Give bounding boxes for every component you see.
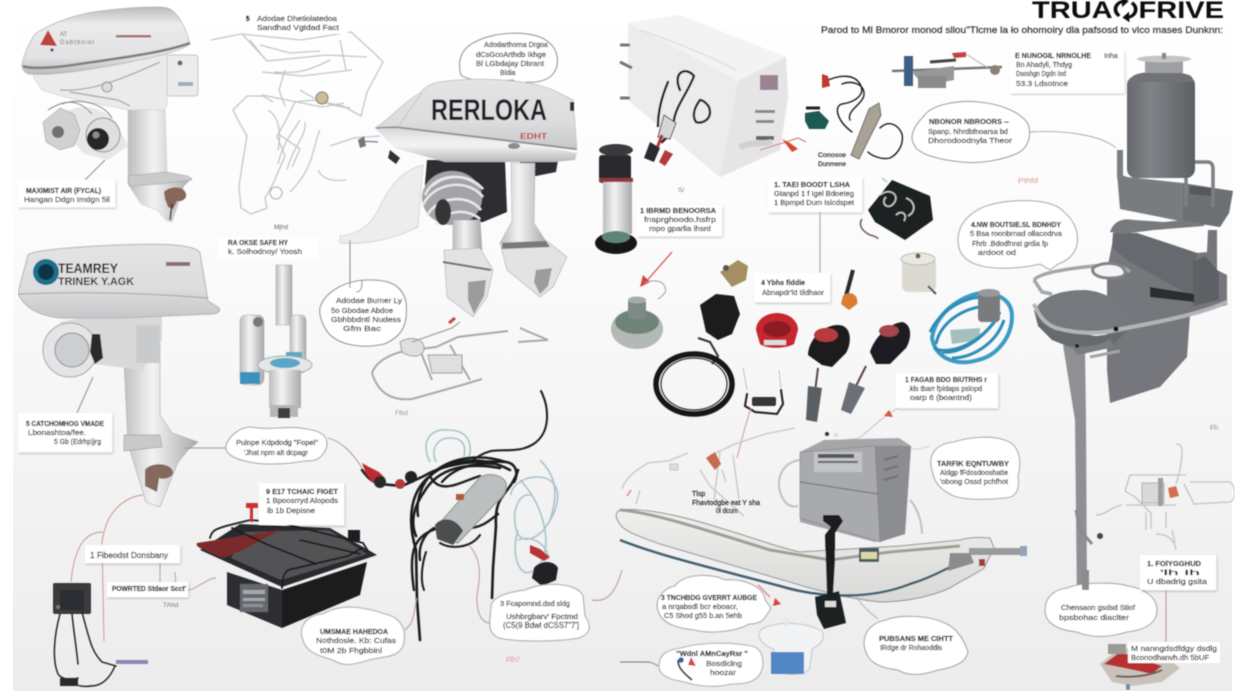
bubble: pump (184, 427, 362, 468)
pipework sketch with caption: 0l dcum (716, 508, 738, 515)
boat hull (616, 510, 1027, 602)
filter cylinders (240, 265, 312, 418)
red machine part with label: M nanngdsdfdgy dsdlg (1131, 646, 1217, 653)
bubble: right bottom: bpsbohac diaclter (1059, 615, 1130, 622)
label: sensors: ropo gparlia ihsrd (649, 226, 711, 233)
label: lower centre right: 1 FAGAB BDO BIUTRHS r (905, 377, 987, 384)
control box with cables (53, 495, 216, 686)
bubble: top centre: Bldia (500, 70, 516, 77)
label: small centre right: Abnapdr'ld tildhaor (762, 290, 825, 297)
bubble: right upper: Dhorodoodnyla Theor (928, 138, 1013, 145)
bracket part (892, 52, 1002, 88)
small notes: S/ (678, 187, 684, 194)
label: mid right (768, 177, 862, 212)
label: mid right: Gtanpd 1 f Igel Bdoeteg (774, 191, 854, 198)
label: case (259, 483, 344, 525)
bubble: pumps lower: 3 TNCHBDG GVERRT AUBGE (661, 595, 757, 602)
label: filter (217, 237, 318, 259)
bubble: lower centre (469, 545, 622, 641)
bubble: ignition (620, 643, 763, 686)
outboard motor: RERLOKA: RERLOKA (431, 94, 547, 127)
label: sketch (246, 13, 348, 34)
label: right lower: 1. FOlYGGHUD (1147, 561, 1201, 568)
label: case: ib 1b Depisne (267, 508, 315, 515)
label: sensors (637, 205, 722, 236)
label: top right: Inha (1104, 53, 1118, 60)
label: sensors: fnsprghoodo.hsfrp (644, 217, 716, 224)
bubble: ignition: hoozar (710, 670, 737, 677)
label: left caption: Lbonashtoa/fee. (28, 430, 86, 437)
bubble: control: Aldgp fFdosdooshatte (940, 470, 1008, 477)
label: powered (107, 582, 188, 597)
label: small centre right (754, 212, 830, 302)
bubble: pump: Pulnpe Kdpdodg "Fopel" (236, 440, 319, 447)
label: top right (1010, 50, 1124, 93)
bubble: right middle: Fhrb .Bdodfnrat grdia fp (972, 241, 1048, 248)
bubble: mid centre left: Gbhbbdntl Nudess (331, 317, 402, 324)
white cooling unit (620, 15, 806, 177)
label: lower centre right: .kls tbarr fpldaps pslopd (908, 386, 982, 393)
small notes: Ffh7 (506, 657, 520, 664)
bubble: lower centre left (301, 598, 417, 664)
label: right lower: 'lh Ih (1160, 570, 1200, 577)
bubble: lower right centre (856, 597, 968, 674)
bubble: mid centre left: 5o Gbodae Abdoe (331, 308, 393, 315)
red machine part with label: Bconodhanvh.dh 5bUF (1131, 655, 1209, 662)
black control case with red handle (197, 503, 377, 628)
gray vertical drive unit (1034, 53, 1233, 602)
label: sketch: Sandhad Vgtdad Fact (257, 25, 339, 32)
bubble: top centre (460, 33, 557, 86)
label: right lower (1140, 555, 1216, 642)
pipework sketch right (1096, 425, 1234, 550)
label: top right: Dsoshgn Dgdn Iod (1016, 71, 1066, 78)
bubble: lower centre left: Nothdosle. Kb: Cufas (316, 638, 397, 645)
label: air intake: MAXIMIST AIR (FYCAL) (26, 188, 101, 195)
bubble: pump: 'Jhat npm alt dcpagr (244, 450, 309, 457)
bubble: pumps lower: a nrqabsdl bcr eboacr, (662, 604, 738, 611)
label: air intake: Hangan Ddgn Imdgn 5il (24, 197, 111, 204)
bubble: lower right centre: IRdge dr Rohaoddis (880, 645, 942, 652)
small notes (163, 187, 684, 664)
wiring components: Dunmene (818, 161, 846, 168)
small notes: 7Ahd (163, 602, 179, 609)
outboard motor: RERLOKA: EDHT (520, 132, 547, 141)
black coil part (860, 178, 933, 240)
gray electronics box (779, 432, 922, 542)
label: case: 1 Bpoosrryd Alopods (266, 498, 339, 505)
label: lower centre right: oarp 6 (boantnd) (910, 395, 972, 402)
outboard motor: TEAMREY: TEAMREY (58, 260, 119, 276)
label: telescopic: 1 Fibeodst Donsbany (90, 551, 168, 560)
bubble: lower centre: (C5(9 Bdwl dCSS7"7'] (503, 621, 579, 630)
bubble: right middle: 4.NW BOUTSIE.SL BDNHDY (971, 222, 1061, 229)
bubble: right upper: Spanp. Nhrdbfnoarsa bd (928, 129, 1008, 136)
bubble: lower centre: 3 Fcapomnd.dsd sldg (500, 601, 570, 608)
label: small centre right: 4 Ybhs fiddie (761, 280, 805, 287)
bubble: top centre: dCsGcoArthdb Ikhge (476, 52, 546, 59)
small notes: Mjhd (274, 224, 288, 231)
label: right lower: U dbadrig gsita (1147, 579, 1207, 586)
bubble: ignition: "Wdnl AMnCayRsr " (676, 651, 748, 658)
pipework sketch with caption (622, 428, 795, 516)
label: sketch: Adodae Dhetiolatedoa (257, 16, 337, 23)
bubble: right bottom: Chensaon gsdsd Stiof (1061, 605, 1135, 612)
wiring components (805, 74, 902, 168)
label: sketch: 5 (246, 16, 250, 23)
small red note: Pthfd (1018, 178, 1038, 185)
red machine part with label (1100, 642, 1220, 690)
bubble: pumps lower: C5 Shod g55 b.an 5ehb (664, 613, 742, 620)
label: top right: E NUNOGIL NRNOLHE (1015, 53, 1091, 60)
red ring and sensors (756, 270, 910, 422)
white bowl with blue label (759, 616, 823, 674)
transparent tubing assembly (350, 240, 548, 399)
label: left caption (18, 377, 112, 452)
bubble: right bottom (1045, 570, 1157, 636)
outboard motor: top left (22, 7, 198, 222)
outboard motor: RERLOKA (340, 79, 577, 317)
pipework sketch right: Fh (1210, 425, 1218, 432)
label: sensors: 1 IBRMD BENOORSA (640, 208, 716, 215)
line sketch of motor (211, 32, 383, 214)
label: case: 9 E17 TCHAIC FIGET (266, 489, 339, 496)
bubble: lower right centre: PUBSANS ME CIHTT (879, 636, 954, 643)
subtitle: Parod to Ml Bmoror monod sllou"Tlcme la ło ohomoiry dla pafsosd to vlco mases Dunknn: (821, 25, 1223, 35)
wire harness and pump (362, 391, 558, 640)
bubble: right upper (912, 102, 1116, 163)
blue hose coil (930, 289, 1012, 362)
bubble: top centre: Bl LGbdajay Dbrant (476, 61, 544, 68)
bubble: lower centre left: UMSMAE HAHEDOA (320, 629, 388, 636)
label: top right: Bn Ahadyli, Thdyg (1016, 62, 1072, 69)
label: filter: RA OKSE SAFE HY (228, 240, 288, 247)
outboard motor: TEAMREY: TRINEK Y.AGK (58, 276, 134, 288)
bubble: lower centre: Ushbrgbarv' Fpctmd (506, 614, 578, 621)
bubble: right middle: 5 Bsa roonbrnad ollacodrva (970, 231, 1062, 238)
label: mid right: 1 Bpmpd Dum Islcdspet (774, 200, 854, 207)
bubble: lower centre left: t0M 2b Fhgbbinl (320, 648, 383, 655)
pipework sketch with caption: Tlsp (692, 491, 705, 498)
outboard motor: top left: Dabtbolat (60, 40, 94, 46)
cable and black plug (815, 515, 846, 629)
bubble: right middle (958, 201, 1078, 270)
bubble: top centre: Adodarthoma Drgoa (484, 42, 548, 49)
green valve (611, 296, 663, 349)
handle with red line (737, 368, 783, 458)
bubble: mid centre left: Adodae Bumer Ly (336, 298, 403, 305)
pipework sketch with caption: Fhavtodgbe eat Y sha (692, 500, 760, 507)
canister (901, 253, 936, 294)
label: powered: POWRTED Stdaor Scct' (112, 586, 186, 593)
outboard motor: top left: AT (60, 32, 68, 38)
label: telescopic (85, 545, 180, 563)
label: filter: k. Solhodnoy/ Yoosh (228, 249, 302, 256)
dark cylinder (595, 144, 637, 254)
black ring harness (656, 260, 748, 414)
bubble: mid centre left: Gfm Bac (343, 326, 382, 333)
bubble: right middle: ardoot od (978, 250, 1016, 257)
label: left caption: 5 CATCHOMHOG VMADE (26, 421, 104, 428)
outboard motor: TEAMREY (18, 244, 220, 507)
label: left caption: 5 Gb (Edrhp)jrg (54, 439, 101, 446)
bubble: right upper: NBONOR NBROORS -- (929, 119, 1010, 126)
bubble: ignition: Bosdiclng (706, 661, 742, 668)
bubble: pumps lower (657, 575, 781, 632)
bubble: control (912, 437, 1020, 499)
bubble: control: 'obong Ossd pchfhot (940, 479, 1008, 486)
bubble: mid centre left (320, 280, 406, 346)
wiring components: Conosoe (818, 152, 846, 159)
small notes: Ffbd (395, 410, 408, 417)
label: lower centre right (846, 373, 998, 440)
bubble: control: TARFIK EQNTUWBY (937, 461, 1009, 468)
red arrow (640, 252, 672, 299)
label: mid right: 1. TAEI BOODT LSHA (774, 182, 850, 189)
label: air intake (18, 160, 115, 207)
label: top right: 53.3 Ldsotnce (1016, 81, 1068, 88)
